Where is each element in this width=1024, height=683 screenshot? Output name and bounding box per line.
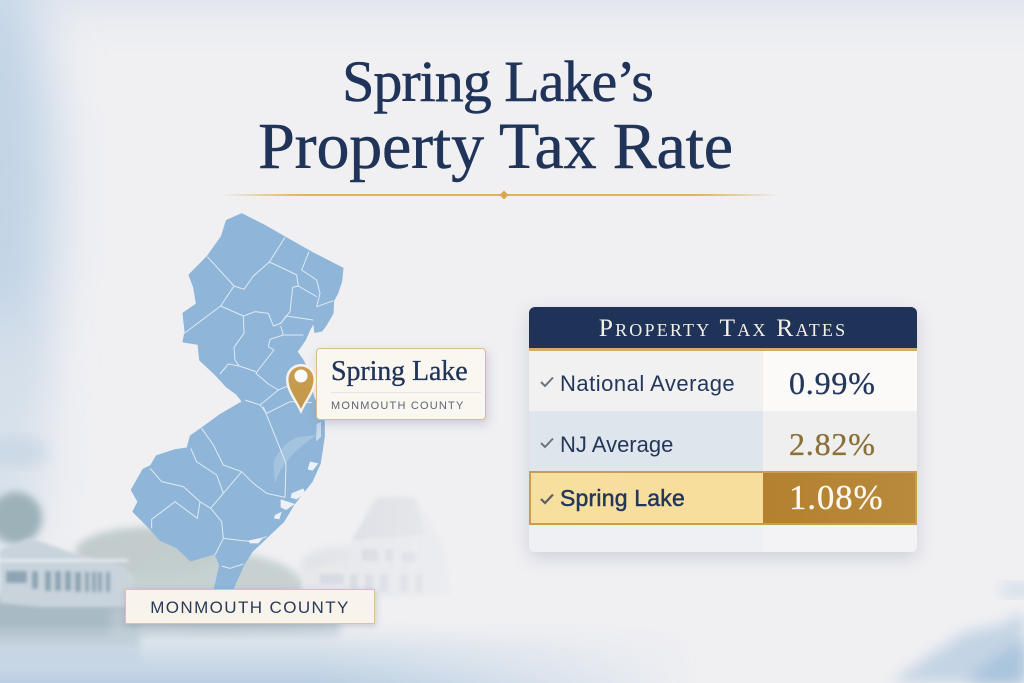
New Jersey county map (130, 213, 344, 589)
table header: Property Tax Rates (599, 313, 847, 342)
callout: Spring Lake (316, 348, 486, 420)
barrier bay (248, 422, 321, 543)
title: Property Tax Rate (258, 110, 733, 183)
row: Spring Lake highlighted: 1.08% (789, 478, 883, 517)
row: national average: 0.99% (789, 365, 876, 401)
table header (529, 307, 917, 348)
callout name: Spring Lake (331, 356, 468, 387)
icon: map pin (286, 364, 316, 414)
empty footer row (529, 525, 917, 552)
row: NJ average: 2.82% (789, 426, 876, 462)
row: NJ average: NJ Average (560, 432, 673, 457)
row: national average: National Average (560, 371, 735, 396)
left house (0, 538, 138, 607)
callout county (331, 392, 481, 413)
state shape (132, 214, 343, 589)
right house (302, 582, 341, 589)
row: Spring Lake highlighted: Spring Lake (560, 485, 685, 511)
title divider (224, 190, 776, 200)
row: national average (529, 351, 917, 411)
title (258, 49, 733, 183)
row: Spring Lake highlighted (529, 471, 917, 525)
label: Monmouth County (125, 589, 375, 624)
title: Spring Lake’s (342, 49, 653, 114)
callout county: MONMOUTH COUNTY (331, 400, 464, 412)
panel: property tax rates table (529, 307, 917, 552)
row: NJ average (529, 411, 917, 471)
label: Monmouth County: MONMOUTH COUNTY (150, 598, 350, 617)
county borders (150, 237, 333, 568)
